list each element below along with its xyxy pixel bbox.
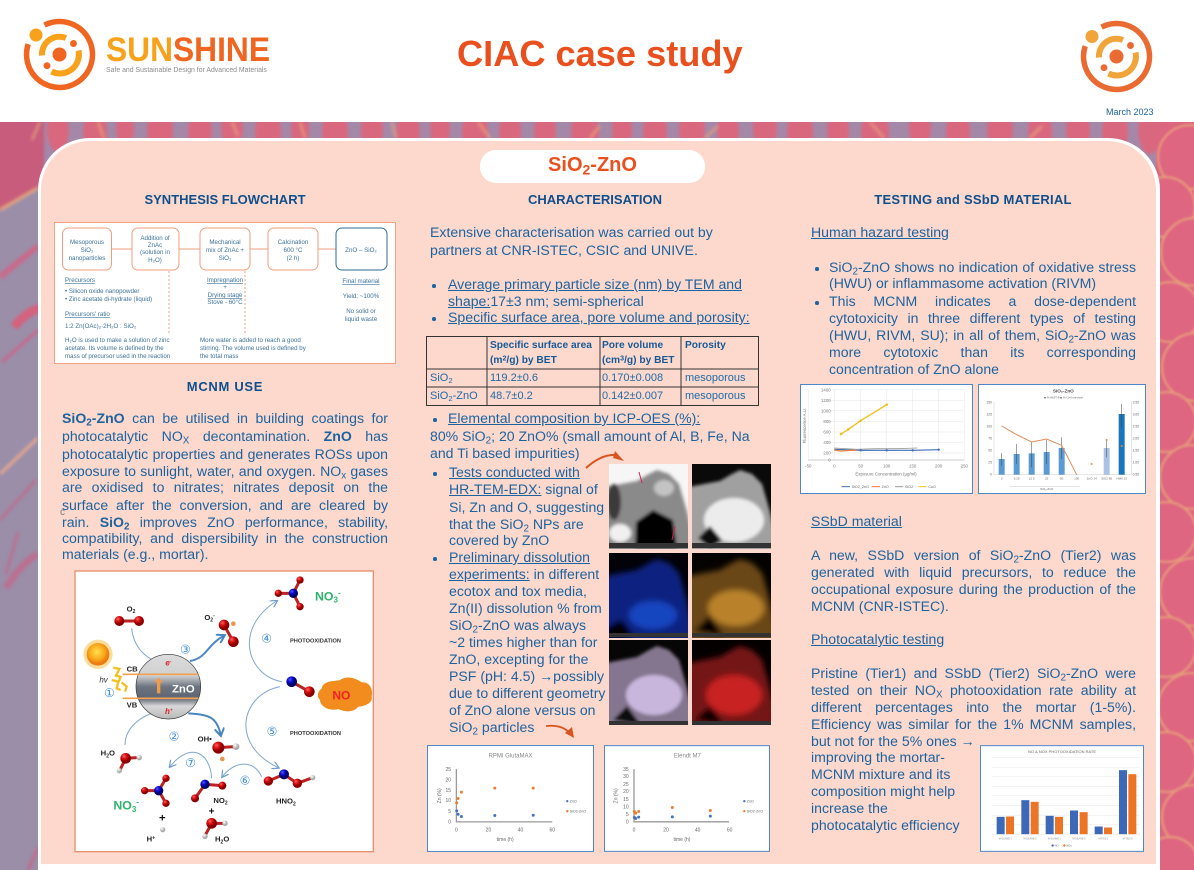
chart: Elendt M7 dissolution: 60 <box>727 828 733 834</box>
text block: tests and dissolution: ~2 times higher than for <box>449 634 597 650</box>
heading: characterisation: CHARACTERISATION <box>528 192 662 207</box>
chart: NO and NOx photooxidation rate bars: M-SILANE-5 <box>1072 838 1086 840</box>
text block: human hazard testing: SiO2-ZnO shows no indication of oxidative stress <box>829 259 1136 277</box>
text block: human hazard testing: (HWU) or inflammasome activation (RIVM) <box>829 275 1096 291</box>
chart: cell survival and WST-8 bars: 6.25 <box>1014 477 1020 481</box>
chart: fluorescence versus exposure concentration: Exposure Concentration (µg/ml) <box>855 471 917 476</box>
text block: human hazard testing: cytotoxicity in three different types of testing <box>829 310 1136 326</box>
flowchart: Drying stage <box>208 292 243 299</box>
diagram: ZnO photocatalysis mechanism: h <box>165 707 170 716</box>
chart: Elendt M7 dissolution: Zn (%) <box>613 788 619 803</box>
diagram: ZnO photocatalysis mechanism: VB <box>127 701 138 710</box>
chart: Elendt M7 dissolution: 20 <box>663 828 669 834</box>
diagram: ZnO photocatalysis mechanism: + <box>209 806 215 817</box>
chart: fluorescence versus exposure concentration: SiO2_ZnO <box>852 485 869 489</box>
chart: fluorescence versus exposure concentration: 400 <box>823 440 831 445</box>
chart: cell survival and WST-8 bars: 25 <box>988 461 992 465</box>
chart: cell survival and WST-8 bars: 2.00 <box>1133 436 1139 440</box>
text block: characterisation intro: Average primary particle size (nm) by TEM and <box>448 276 742 292</box>
chart: RPMI GlutaMAX dissolution: 0 <box>448 820 451 826</box>
chart: RPMI GlutaMAX dissolution: 25 <box>445 767 451 773</box>
chart: cell survival and WST-8 bars: 0.50 <box>1133 473 1139 477</box>
chart: cell survival and WST-8 bars: 0 <box>990 473 992 477</box>
chart: fluorescence versus exposure concentration: 200 <box>823 451 831 456</box>
heading: MCNM use: MCNM USE <box>187 379 263 394</box>
text block: MCNM use: rain. SiO2 improves ZnO performance, stability, <box>62 514 388 532</box>
chart: fluorescence versus exposure concentration: CuO <box>928 485 936 489</box>
icon: right logo emblem <box>1080 20 1152 92</box>
diagram: ZnO photocatalysis mechanism: OH• <box>198 735 212 744</box>
text block: human hazard testing: Human hazard testing <box>811 224 949 240</box>
chart: RPMI GlutaMAX dissolution: Zn (%) <box>437 788 443 803</box>
text block: human hazard testing: (HWU, RIVM, SU); in all of them, SiO2-ZnO was <box>829 327 1136 345</box>
diagram: ZnO photocatalysis mechanism: O <box>127 604 133 613</box>
flowchart: ZnO – SiO₂ <box>345 247 377 254</box>
chart: RPMI GlutaMAX dissolution: 20 <box>486 828 491 834</box>
text block: elemental composition: 80% SiO2; 20 ZnO% (small amount of Al, B, Fe, Na <box>430 428 750 446</box>
heading: synthesis flowchart: SYNTHESIS FLOWCHART <box>144 192 306 207</box>
diagram: ZnO photocatalysis mechanism: + <box>170 707 173 712</box>
chart: cell survival and WST-8 bars: SiO₂-ZnO <box>1040 487 1054 491</box>
chart: cell survival and WST-8 bars: 12.5 <box>1029 477 1035 481</box>
chart: NO and NOx photooxidation rate bars: M-SILANE-1 <box>999 838 1013 840</box>
text block: elemental composition: and Ti based impurities) <box>430 445 580 461</box>
diagram: ZnO photocatalysis mechanism: NO <box>113 799 132 813</box>
text block: tests and dissolution: PSF (pH: 4.5) →possibly <box>449 668 604 684</box>
chart: fluorescence versus exposure concentration: Fluorescence A.U. <box>802 408 807 443</box>
text block: SSbD material: MCNM (CNR-ISTEC). <box>811 598 949 614</box>
flowchart: • Silicon oxide nanopowder <box>65 288 139 295</box>
text block: tests and dissolution: covered by ZnO <box>449 532 549 548</box>
chart: RPMI GlutaMAX dissolution <box>427 745 594 852</box>
flowchart: Addition of <box>140 235 170 242</box>
diagram: ZnO photocatalysis mechanism <box>74 570 374 852</box>
flowchart: Calcination <box>278 239 309 246</box>
text block: characterisation intro: Specific surface area, pore volume and porosity: <box>448 309 750 325</box>
chart: cell survival and WST-8 bars: 125 <box>986 412 992 416</box>
diagram: ZnO photocatalysis mechanism: 3 <box>132 805 137 814</box>
diagram: ZnO photocatalysis mechanism: H <box>147 835 152 844</box>
flowchart: H₂O is used to make a solution of zinc <box>65 337 170 344</box>
diagram: ZnO photocatalysis mechanism: PHOTOOXIDATION <box>290 731 341 737</box>
text block: photocatalytic testing: Pristine (Tier1) and SSbD (Tier2) SiO2-ZnO were <box>811 665 1136 683</box>
diagram: ZnO photocatalysis mechanism: ④ <box>261 631 272 645</box>
chart: NO and NOx photooxidation rate bars: M-TiO2-5 <box>1123 838 1133 840</box>
flowchart: Impregnation <box>207 277 244 284</box>
text block: photocatalytic testing: improving the mortar- <box>811 749 945 765</box>
flowchart: (2 h) <box>287 255 299 262</box>
chart: cell survival and WST-8 bars: 100 <box>986 424 992 428</box>
chart: cell survival and WST-8 bars: 150 <box>986 400 992 404</box>
diagram: ZnO photocatalysis mechanism: O <box>109 749 115 758</box>
chart: Elendt M7 dissolution <box>604 745 770 852</box>
flowchart: Precursors <box>65 277 95 284</box>
text block: tests and dissolution: of ZnO alone versus on <box>449 702 596 718</box>
diagram: ZnO photocatalysis mechanism: e <box>165 659 170 668</box>
chart: RPMI GlutaMAX dissolution: time (h) <box>497 837 514 843</box>
text block: photocatalytic testing: tested on their NOX photooxidation rate ability at <box>811 682 1136 700</box>
flowchart <box>54 222 396 364</box>
chart: RPMI GlutaMAX dissolution: 0 <box>455 828 458 834</box>
chart: cell survival and WST-8 bars: SiO₂-ZnO <box>1053 389 1074 394</box>
text block: tests and dissolution: ecotox and tox media, <box>449 583 587 599</box>
panel: main content card <box>38 138 1160 870</box>
text block: MCNM use: photocatalytic properties and generates ROSs upon <box>62 446 388 462</box>
panel c <box>609 553 688 638</box>
flowchart: acetate. Its volume is defined by the <box>65 345 164 352</box>
chart: fluorescence versus exposure concentration: 1000 <box>821 408 831 413</box>
text block: photocatalytic testing: Efficiency was similar for the 1% MCNM samples, <box>811 716 1136 732</box>
table: BET properties: 119.2±0.6 <box>490 372 538 384</box>
chart: fluorescence versus exposure concentration: 0 <box>833 463 836 468</box>
sun <box>83 640 113 669</box>
diagram: ZnO photocatalysis mechanism: ZnO <box>172 684 195 696</box>
chart: cell survival and WST-8 bars: 3.00 <box>1133 412 1139 416</box>
text block: SSbD material <box>811 513 1136 614</box>
diagram: ZnO photocatalysis mechanism: - <box>213 613 215 619</box>
text block: SSbD material: generated with liquid precursors, to reduce the <box>811 564 1136 580</box>
chart: fluorescence versus exposure concentration: -50 <box>805 463 812 468</box>
chart: cell survival and WST-8 bars: ZnO 14 <box>1087 477 1097 481</box>
chart: NO and NOx photooxidation rate bars: M-SILANE-5 <box>1023 838 1037 840</box>
chart: NO and NOx photooxidation rate bars: M-TiO2-1 <box>1098 838 1109 840</box>
diagram: ZnO photocatalysis mechanism: - <box>136 798 139 807</box>
image grid: TEM and EDX maps <box>609 464 771 725</box>
panel f <box>692 640 771 725</box>
text block: characterisation intro: partners at CNR-ISTEC, CSIC and UNIVE. <box>430 242 698 258</box>
text block: tests and dissolution: SiO2 particles <box>449 719 534 737</box>
ZnO sphere <box>136 654 201 719</box>
chart: RPMI GlutaMAX dissolution: RPMI GlutaMAX <box>488 753 533 759</box>
text block: tests and dissolution: that the SiO2 NPs are <box>449 516 584 534</box>
text block: MCNM use: surface after the conversion, and are cleared by <box>62 497 388 513</box>
diagram: ZnO photocatalysis mechanism: ① <box>104 686 115 700</box>
chart: fluorescence versus exposure concentration: 100 <box>883 463 891 468</box>
flowchart: SiO₂ <box>81 247 94 254</box>
chart: cell survival and WST-8 bars: 50 <box>1060 477 1064 481</box>
chart: cell survival and WST-8 bars: 50 <box>988 449 992 453</box>
chart: Elendt M7 dissolution: 0 <box>626 820 629 826</box>
text block: MCNM use: exposure to sunlight, water, and oxygen. NOx gases <box>62 463 388 481</box>
panel d <box>692 553 771 638</box>
diagram: ZnO photocatalysis mechanism: + <box>152 835 155 841</box>
text block: MCNM use: SiO2-ZnO can be utilised in building coatings for <box>62 410 388 428</box>
text block: human hazard testing: more cytotoxic than its corresponding <box>829 344 1136 360</box>
text block: photocatalytic testing: different percentages into the mortar (1-5%). <box>811 699 1136 715</box>
table: BET properties: 0.170±0.008 <box>602 372 663 384</box>
chart: cell survival and WST-8 bars <box>978 384 1146 494</box>
tagline: Safe and Sustainable Design for Advanced Materials <box>106 66 267 74</box>
text block: human hazard testing: concentration of ZnO alone <box>829 361 999 377</box>
chart: cell survival and WST-8 bars: 1.00 <box>1133 461 1139 465</box>
title: CIAC case study <box>457 33 743 74</box>
text block: tests and dissolution: Tests conducted with <box>449 464 580 480</box>
diagram: ZnO photocatalysis mechanism: ⑤ <box>267 725 277 739</box>
table: BET properties: mesoporous <box>685 372 746 384</box>
table: BET properties: Pore volume <box>602 340 663 351</box>
chart: Elendt M7 dissolution: 35 <box>623 767 629 773</box>
chart: cell survival and WST-8 bars: 0 <box>1001 477 1003 481</box>
chart: fluorescence versus exposure concentration: 50 <box>858 463 864 468</box>
table: BET properties <box>426 336 759 406</box>
diagram: ZnO photocatalysis mechanism: 2 <box>210 618 213 624</box>
chart: fluorescence versus exposure concentration: 0 <box>828 458 831 463</box>
chart: fluorescence versus exposure concentration: ZnO <box>882 485 889 489</box>
flowchart: liquid waste <box>345 316 378 323</box>
diagram: ZnO photocatalysis mechanism: hv <box>99 675 109 684</box>
text block: photocatalytic testing: Photocatalytic testing <box>811 631 944 647</box>
chart: Elendt M7 dissolution: 5 <box>626 812 629 818</box>
text block: tests and dissolution: Zn(II) dissolution % from <box>449 600 602 616</box>
chart: Elendt M7 dissolution: SiO2-ZnO <box>747 810 763 814</box>
flowchart: mass of precursor used in the reaction <box>65 353 171 360</box>
chart: RPMI GlutaMAX dissolution: 40 <box>518 828 524 834</box>
text block: tests and dissolution: experiments: in different <box>449 566 599 582</box>
flowchart: H₂O) <box>148 257 162 264</box>
text block: characterisation intro: shape:17±3 nm; semi-spherical <box>448 293 644 309</box>
text block: elemental composition: Elemental composition by ICP-OES (%): <box>448 410 700 426</box>
text block: tests and dissolution: ZnO, excepting for the <box>449 651 588 667</box>
chart: cell survival and WST-8 bars: NM0 13 <box>1116 477 1127 481</box>
flowchart: Final material <box>342 278 380 285</box>
text block: tests and dissolution: due to different geometry <box>449 685 605 701</box>
chart: RPMI GlutaMAX dissolution: ZnO <box>570 800 577 804</box>
chart: Elendt M7 dissolution: ZnO <box>747 800 754 804</box>
text block: human hazard testing <box>811 224 1136 377</box>
flowchart: ZnAc <box>148 242 162 249</box>
chart: Elendt M7 dissolution: 40 <box>695 828 701 834</box>
text block: elemental composition <box>430 410 750 461</box>
table: BET properties: SiO2-ZnO <box>430 390 478 403</box>
chart: Elendt M7 dissolution: 25 <box>623 782 629 788</box>
icon: orbit emblem <box>24 18 96 90</box>
diagram: ZnO photocatalysis mechanism: 2 <box>133 609 136 615</box>
text block: characterisation intro <box>430 224 750 325</box>
chart: fluorescence versus exposure concentration: 800 <box>823 419 831 424</box>
chart: RPMI GlutaMAX dissolution: 20 <box>445 777 451 783</box>
chart: fluorescence versus exposure concentration: 600 <box>823 430 831 435</box>
flowchart: 600 °C <box>284 247 303 254</box>
diagram: ZnO photocatalysis mechanism: 2 <box>221 839 224 845</box>
chart: NO and NOx photooxidation rate bars: NOx <box>1066 844 1072 848</box>
heading: testing and SSbD material: TESTING and SSbD MATERIAL <box>874 192 1072 207</box>
arrow: to TEM images <box>585 451 624 469</box>
diagram: ZnO photocatalysis mechanism: - <box>170 659 172 664</box>
table: BET properties: 0.142±0.007 <box>602 390 663 402</box>
text block: SSbD material: occupational exposure during the production of the <box>811 581 1136 597</box>
flowchart: More water is added to reach a good <box>200 337 301 344</box>
panel e <box>609 640 688 725</box>
diagram: ZnO photocatalysis mechanism: HNO <box>276 797 293 806</box>
diagram: ZnO photocatalysis mechanism: O <box>204 613 210 622</box>
text block: SSbD material: A new, SSbD version of SiO2-ZnO (Tier2) was <box>811 547 1136 565</box>
text block: tests and dissolution <box>433 464 606 737</box>
chart: RPMI GlutaMAX dissolution: 60 <box>549 828 555 834</box>
diagram: ZnO photocatalysis mechanism: 3 <box>334 596 338 605</box>
molecules <box>119 580 313 836</box>
chart: cell survival and WST-8 bars: 75 <box>988 436 992 440</box>
chart: RPMI GlutaMAX dissolution: SiO2-ZnO <box>570 810 586 814</box>
heading pill: SiO2-ZnO: SiO2-ZnO <box>548 154 637 178</box>
chart: fluorescence versus exposure concentration: SiO2 <box>905 485 913 489</box>
table: BET properties: Specific surface area <box>490 340 592 351</box>
chart: fluorescence versus exposure concentration: 250 <box>961 463 969 468</box>
diagram: ZnO photocatalysis mechanism: NO <box>213 796 225 805</box>
table: BET properties: 48.7±0.2 <box>490 390 533 402</box>
chart: RPMI GlutaMAX dissolution: 5 <box>448 809 451 815</box>
text block: tests and dissolution: Preliminary dissolution <box>449 549 590 565</box>
text block: photocatalytic testing: but not for the 5% ones → <box>811 733 975 749</box>
diagram: ZnO photocatalysis mechanism: ⑦ <box>185 756 196 770</box>
chart: cell survival and WST-8 bars: 1.50 <box>1133 449 1139 453</box>
chart: fluorescence versus exposure concentration <box>800 384 973 494</box>
flowchart: Stove - 60°C <box>207 299 243 306</box>
chart: fluorescence versus exposure concentration: 150 <box>909 463 917 468</box>
table: BET properties: Porosity <box>685 340 726 351</box>
chart: NO and NOx photooxidation rate bars: M-SILANE-1 <box>1048 838 1062 840</box>
heading pill: SiO2-ZnO <box>480 150 705 183</box>
text block: MCNM use <box>60 410 388 562</box>
flowchart: 1:2 Zn(OAc)₂·2H₂O : SiO₂ <box>65 323 137 330</box>
text block: MCNM use: materials (e.g., mortar). <box>62 546 208 562</box>
chart: cell survival and WST-8 bars: 2.50 <box>1133 424 1139 428</box>
logo: SUNSHINE wordmark and emblem <box>24 18 270 90</box>
diagram: ZnO photocatalysis mechanism: + <box>159 813 166 825</box>
diagram: ZnO photocatalysis mechanism: 2 <box>293 801 296 807</box>
diagram: ZnO photocatalysis mechanism: O <box>223 835 229 844</box>
flowchart: nanoparticles <box>69 255 105 262</box>
text block: MCNM use: compatibility, and dispersibility in the construction <box>62 530 388 546</box>
text block: photocatalytic testing: composition might help <box>811 783 955 799</box>
chart: fluorescence versus exposure concentration: 1400 <box>821 387 831 392</box>
chart: Elendt M7 dissolution: 30 <box>623 774 629 780</box>
chart: Elendt M7 dissolution: Elendt M7 <box>674 754 702 760</box>
diagram: ZnO photocatalysis mechanism: 2 <box>225 801 228 807</box>
text block: MCNM use: photocatalytic NOX decontamination. ZnO has <box>62 428 388 446</box>
diagram: ZnO photocatalysis mechanism: H <box>215 835 221 844</box>
chart: cell survival and WST-8 bars: ■ % WST-8 ■ % Cell survival <box>1044 396 1083 400</box>
text block: photocatalytic testing <box>811 631 1136 833</box>
panel a <box>609 464 688 549</box>
chart: Elendt M7 dissolution: 20 <box>623 789 629 795</box>
text block: MCNM use: are oxidised to nitrates; nitrates deposit on the <box>62 479 388 495</box>
text block: tests and dissolution: SiO2-ZnO was always <box>449 617 586 635</box>
table: BET properties: (m2/g) by BET <box>490 354 557 366</box>
chart: fluorescence versus exposure concentration: 1200 <box>821 398 831 403</box>
flowchart: Mesoporous <box>70 239 104 246</box>
panel b <box>692 464 771 549</box>
text block: photocatalytic testing: photocatalytic efficiency <box>811 817 960 833</box>
diagram: ZnO photocatalysis mechanism: PHOTOOXIDATION <box>290 638 341 644</box>
text block: photocatalytic testing: increase the <box>811 800 888 816</box>
chart: cell survival and WST-8 bars: 100 <box>1074 477 1079 481</box>
diagram: ZnO photocatalysis mechanism: ⑥ <box>240 773 250 787</box>
chart: Elendt M7 dissolution: 15 <box>623 797 629 803</box>
chart: Elendt M7 dissolution: 10 <box>623 804 629 810</box>
date: March 2023 <box>1106 107 1154 117</box>
text block: SSbD material: SSbD material <box>811 513 902 529</box>
diagram: ZnO photocatalysis mechanism: 2 <box>106 753 109 759</box>
diagram: ZnO photocatalysis mechanism: NO <box>315 589 334 603</box>
chart: NO and NOx photooxidation rate bars: NO <box>1055 844 1059 848</box>
table: BET properties: (cm3/g) by BET <box>602 354 674 366</box>
arrows <box>125 601 282 778</box>
flowchart: the total mass <box>200 353 239 360</box>
text block: MCNM use: c <box>60 507 65 518</box>
chart: fluorescence versus exposure concentration: 200 <box>935 463 943 468</box>
diagram: ZnO photocatalysis mechanism: ③ <box>180 643 191 657</box>
diagram: ZnO photocatalysis mechanism: H <box>101 749 106 758</box>
chart: Elendt M7 dissolution: time (h) <box>674 837 691 843</box>
NO cloud <box>318 677 372 711</box>
table: BET properties: SiO2 <box>430 372 453 385</box>
flowchart: Yield: ~100% <box>343 293 380 300</box>
text block: tests and dissolution: HR-TEM-EDX: signal of <box>449 481 598 497</box>
flowchart: (solution in <box>140 249 171 256</box>
flowchart: mix of ZnAc + <box>206 247 244 254</box>
chart: cell survival and WST-8 bars: SiO2 80 <box>1101 477 1112 481</box>
text block: human hazard testing: This MCNM indicates a dose-dependent <box>829 293 1136 309</box>
text block: tests and dissolution: Si, Zn and O, suggesting <box>449 499 604 515</box>
flowchart: Precursors' ratio <box>65 311 110 318</box>
chart: cell survival and WST-8 bars: 25 <box>1045 477 1049 481</box>
flowchart: SiO₂ <box>219 255 232 262</box>
chart: NO and NOx photooxidation rate bars <box>980 745 1144 852</box>
diagram: ZnO photocatalysis mechanism: NO <box>332 688 350 702</box>
chart: RPMI GlutaMAX dissolution: 15 <box>445 788 451 794</box>
chart: NO and NOx photooxidation rate bars: NO & NOX PHOTOOXIDATION RATE <box>1028 749 1096 754</box>
diagram: ZnO photocatalysis mechanism: ② <box>169 729 179 743</box>
flowchart: Mechanical <box>209 239 241 246</box>
chart: Elendt M7 dissolution: 0 <box>633 828 636 834</box>
chart: RPMI GlutaMAX dissolution: 10 <box>445 798 451 804</box>
flowchart: No solid or <box>346 308 376 315</box>
chart: cell survival and WST-8 bars: 3.50 <box>1133 400 1139 404</box>
arrow: to dissolution charts <box>546 724 574 738</box>
diagram: ZnO photocatalysis mechanism: - <box>338 588 341 597</box>
text block: characterisation intro: Extensive characterisation was carried out by <box>430 224 713 240</box>
flowchart: + <box>223 284 227 291</box>
diagram: ZnO photocatalysis mechanism: CB <box>127 664 138 673</box>
flowchart: • Zinc acetate di-hydrate (liquid) <box>65 296 152 303</box>
text block: photocatalytic testing: MCNM mixture and its <box>811 766 950 782</box>
flowchart: stirring. The volume used is defined by <box>200 345 307 352</box>
wordmark: SUNSHINE <box>106 31 270 69</box>
table: BET properties: mesoporous <box>685 390 746 402</box>
